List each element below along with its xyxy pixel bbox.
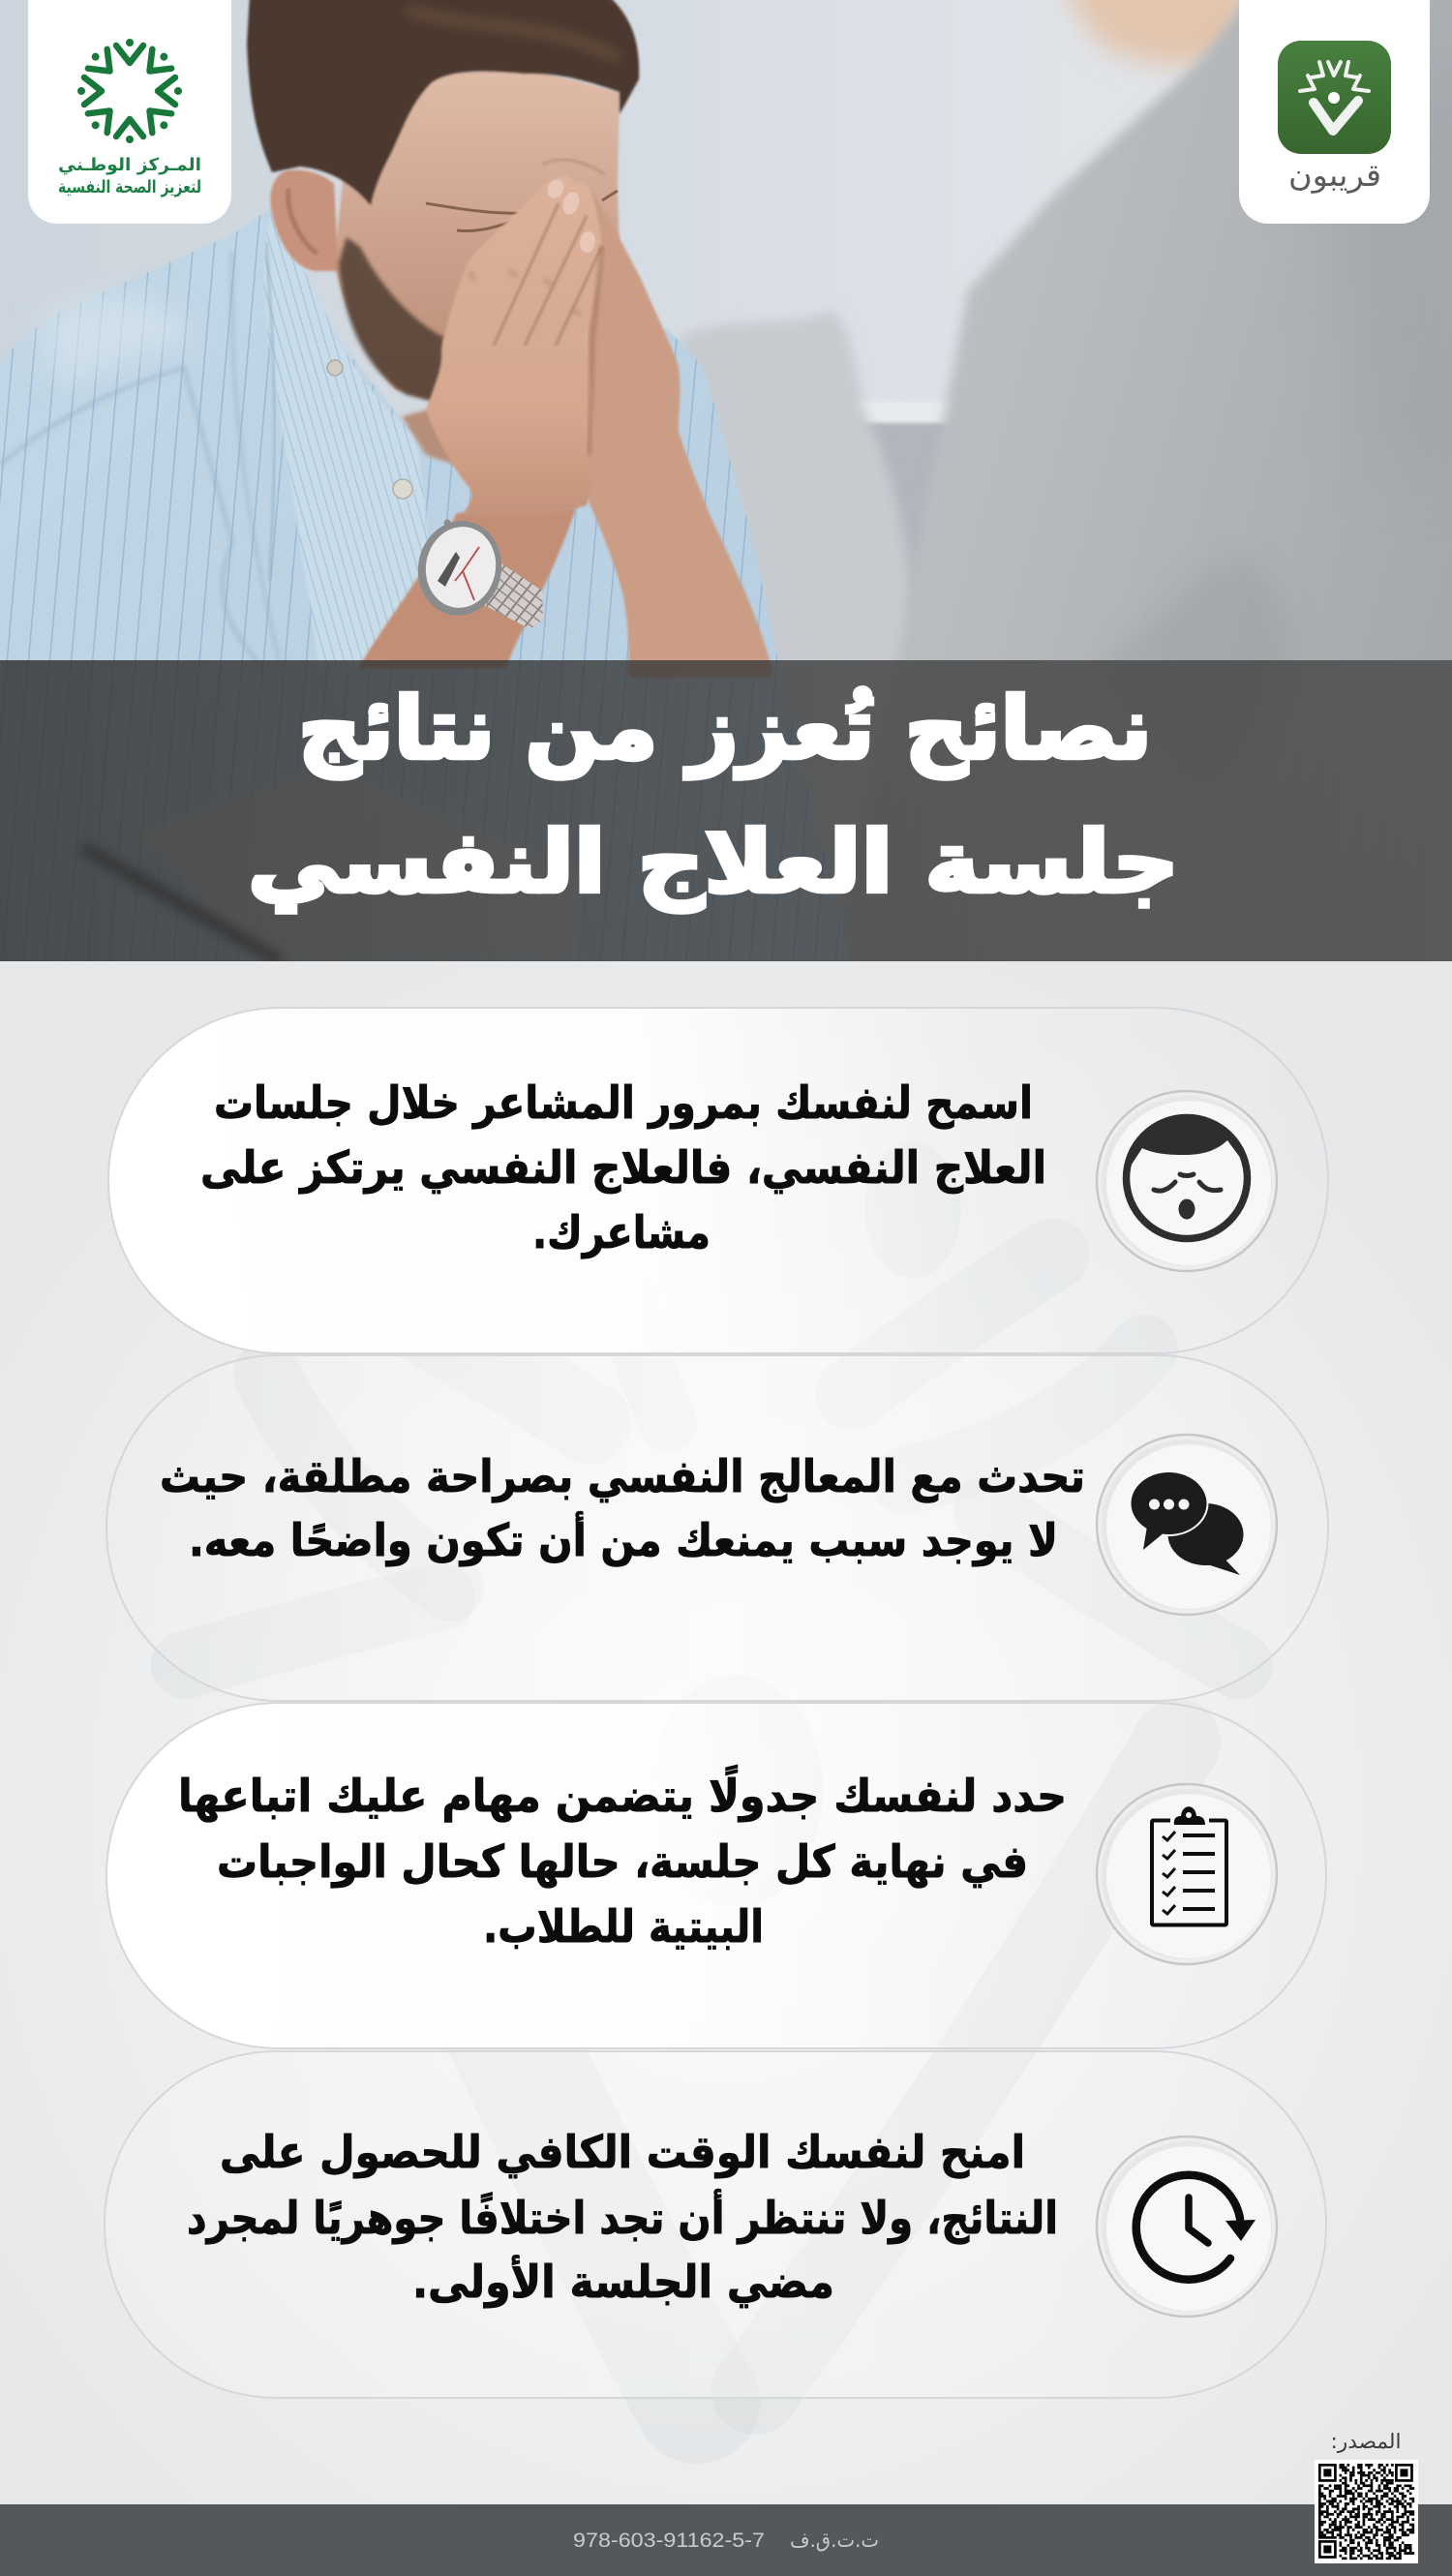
isbn label: ت.ت.ق.ف [790, 2529, 879, 2552]
front forearm [358, 508, 576, 668]
watch [410, 514, 543, 629]
shirt [0, 207, 852, 968]
app name: قريبون [1288, 157, 1381, 194]
sofa and pillow [680, 312, 947, 660]
text: tip 1: اسمح لنفسك بمرور المشاعر خلال جلسات [214, 1076, 1033, 1129]
footer bar [0, 2504, 1452, 2576]
text: tip 1: مشاعرك. [532, 1206, 711, 1258]
panel: tip 4 [105, 2051, 1326, 2398]
title: جلسة العلاج النفسي [248, 812, 1179, 913]
therapist [898, 0, 1452, 961]
text: tip 2: تحدث مع المعالج النفسي بصراحة مطلقة، حيث [160, 1450, 1085, 1502]
QR finder markers [1317, 2463, 1415, 2561]
source label: المصدر: [1330, 2430, 1402, 2453]
icon: star emblem [77, 39, 182, 143]
title: نصائح تُعزز من نتائج [298, 679, 1152, 778]
title band [0, 660, 1452, 961]
ear [270, 170, 339, 271]
text: tip 2 [160, 1450, 1085, 1566]
photo: man in distress with therapist [0, 0, 1452, 1065]
text: tip 4 [187, 2126, 1058, 2308]
title [248, 679, 1179, 913]
wall [0, 0, 995, 424]
beard [339, 237, 447, 405]
panel: tip 2 [106, 1355, 1328, 1701]
icon: chat bubbles [1097, 1435, 1277, 1615]
clipboard on lap [79, 781, 565, 961]
center name: المـركز الوطـني [58, 155, 201, 175]
center name [58, 155, 201, 197]
text: tip 3: في نهاية كل جلسة، حالها كحال الواجبات [217, 1835, 1028, 1888]
arms and hands [358, 175, 771, 678]
isbn text: 978-603-91162-5-7 [573, 2530, 765, 2552]
watermark logo shapes [185, 1142, 1239, 2401]
icon: app mark [1300, 62, 1369, 131]
icon: clipboard [1097, 1784, 1277, 1964]
text: tip 1: العلاج النفسي، فالعلاج النفسي يرتكز على [200, 1141, 1046, 1194]
eye and brows [426, 191, 618, 231]
text: tip 3: البيتية للطلاب. [483, 1900, 764, 1953]
text: tip 4: النتائج، ولا تنتظر أن تجد اختلافًا جوهريًا لمجرد [187, 2189, 1058, 2244]
text: tip 4: امنح لنفسك الوقت الكافي للحصول على [220, 2126, 1025, 2178]
collar and placket [263, 207, 436, 668]
finger creases [494, 203, 602, 346]
icon: clock [1097, 2137, 1277, 2317]
logo card: app [1239, 0, 1430, 224]
text: tip 2: لا يوجد سبب يمنعك من أن تكون واضحًا معه. [189, 1511, 1058, 1566]
QR code [1315, 2460, 1418, 2563]
text: tip 3: حدد لنفسك جدولًا يتضمن مهام عليك اتباعها [178, 1765, 1067, 1822]
panel: tip 1 [108, 1008, 1328, 1353]
icon: face [1097, 1091, 1277, 1271]
lower background [0, 961, 1452, 2510]
fingernails [548, 180, 563, 197]
head [247, 0, 639, 407]
text: tip 3 [178, 1765, 1067, 1953]
text: tip 1 [200, 1076, 1046, 1258]
front hand [426, 175, 602, 518]
panel: tip 3 [106, 1703, 1326, 2048]
text: tip 4: مضي الجلسة الأولى. [412, 2255, 834, 2308]
center name: لتعزيز الصحة النفسية [58, 177, 201, 197]
rear hand and forearm [587, 184, 771, 678]
logo card: national center [28, 0, 231, 224]
hair [247, 0, 639, 205]
